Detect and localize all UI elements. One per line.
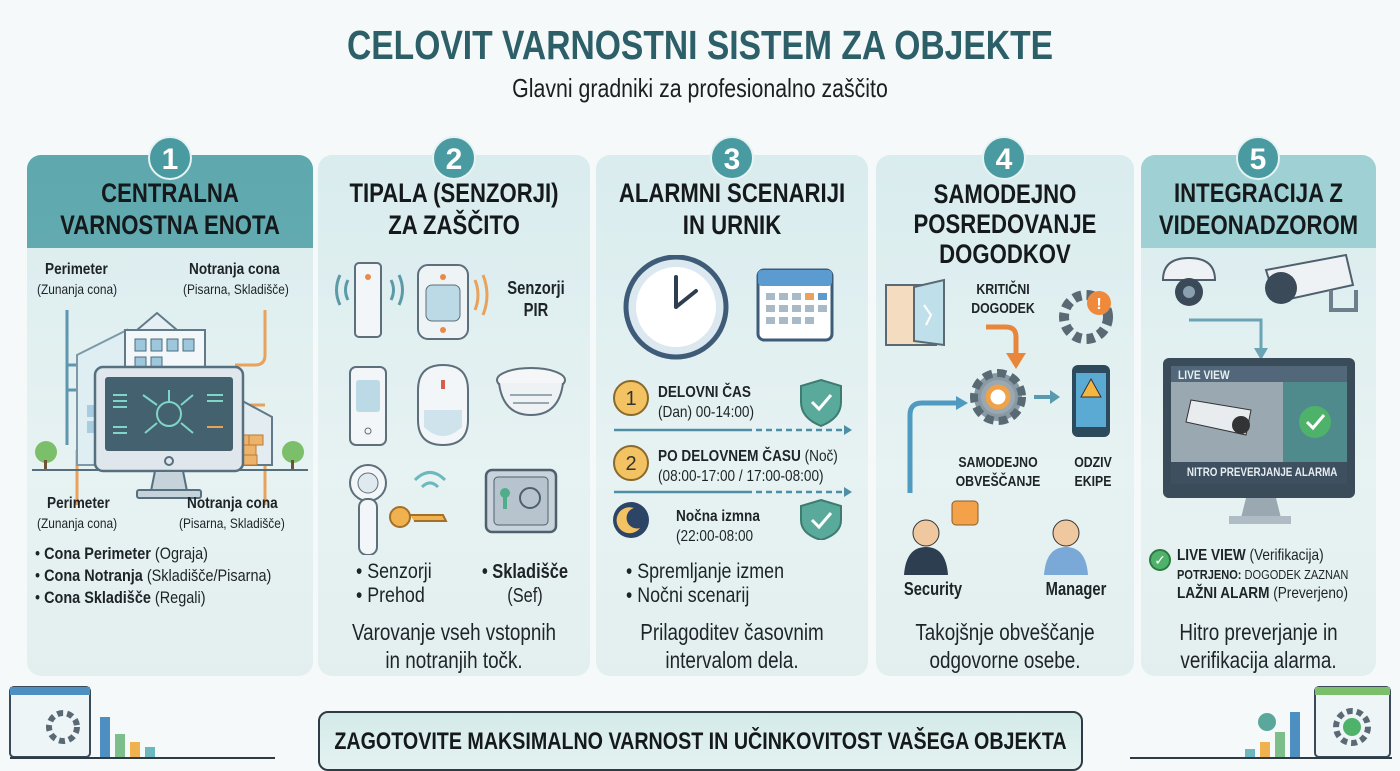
verification list: LAŽNI ALARM (Preverjeno) (1177, 585, 1348, 602)
number badge 5 (1236, 136, 1280, 180)
label senzorji PIR: PIR (524, 300, 548, 320)
panel 3: scenarios: PO DELOVNEM ČASU (Noč) (658, 448, 838, 465)
heading: ALARMNI SCENARIJI (619, 178, 845, 208)
icon: check: ✓ (1154, 552, 1166, 568)
panel 2: sensors: (Sef) (507, 585, 543, 607)
illustration: building and monitor (32, 310, 308, 505)
heading (1159, 178, 1358, 240)
bullet list: • Senzorji (356, 560, 432, 583)
sensor icons (335, 262, 566, 555)
label kriticni: KRITIČNI (976, 281, 1030, 298)
title: CELOVIT VARNOSTNI SISTEM ZA OBJEKTE (347, 22, 1053, 68)
label samodejno (956, 454, 1040, 490)
label samodejno: SAMODEJNO (958, 454, 1038, 471)
heading: CENTRALNA (101, 178, 239, 208)
number badge 2 (432, 136, 476, 180)
labels bottom: Perimeter (47, 495, 110, 512)
bottom banner (318, 711, 1083, 771)
person labels: Security (904, 579, 962, 599)
label kriticni: DOGODEK (971, 300, 1035, 317)
description: Prilagoditev časovnim (640, 619, 824, 645)
panel 5: video integration (1141, 155, 1376, 676)
label odziv: ODZIV (1074, 454, 1112, 471)
label kriticni (971, 280, 1035, 317)
verification list: POTRJENO: DOGODEK ZAZNAN (1177, 567, 1348, 582)
heading: SAMODEJNO (934, 179, 1076, 209)
bullet list zones: • Cona Notranja (Skladišče/Pisarna) (35, 566, 271, 585)
schedule text: DELOVNI ČAS (658, 384, 751, 401)
screen labels: LIVE VIEW (1178, 368, 1230, 382)
heading: INTEGRACIJA Z (1174, 178, 1343, 208)
heading: VIDEONADZOROM (1159, 210, 1358, 240)
panel 1: central unit (27, 155, 313, 676)
verification list: LIVE VIEW (Verifikacija) (1177, 547, 1324, 564)
panel 4: automatic event handling: Manager (1046, 579, 1106, 599)
header band (1141, 155, 1376, 248)
subtitle: Glavni gradniki za profesionalno zaščito (512, 73, 888, 103)
schedule rows: 1 (625, 388, 637, 410)
description: Hitro preverjanje in (1179, 619, 1338, 645)
bullet list zones: • Cona Perimeter (Ograja) (35, 544, 208, 563)
number badge 1: 1 (162, 143, 178, 176)
heading (349, 178, 559, 240)
bullet list zones: • Cona Skladišče (Regali) (35, 588, 206, 607)
labels top: Notranja cona (189, 261, 280, 278)
number badge 4: 4 (996, 143, 1012, 176)
heading: ZA ZAŠČITO (388, 210, 520, 240)
verification list (1149, 547, 1348, 602)
panel 3: scenarios: Nočna izmna (676, 508, 760, 525)
schedule text: (Dan) 00-14:00) (658, 404, 754, 421)
panel 2: sensors (318, 155, 590, 676)
labels top (37, 261, 289, 297)
description: odgovorne osebe. (929, 647, 1081, 673)
panel 3: scenarios: (22:00-08:00 (676, 528, 753, 545)
heading: POSREDOVANJE (914, 209, 1096, 239)
heading (60, 178, 280, 240)
bullet list zones (35, 544, 271, 607)
decoration left: window with gear and bars (9, 686, 275, 759)
description: Varovanje vseh vstopnih (352, 619, 556, 645)
description: intervalom dela. (665, 647, 799, 673)
label odziv: EKIPE (1075, 473, 1111, 490)
description (1179, 619, 1338, 673)
description (915, 619, 1095, 673)
cameras and monitor (1162, 254, 1358, 524)
labels top: (Pisarna, Skladišče) (183, 281, 289, 297)
number badge 4 (982, 136, 1026, 180)
schedule rows: 2 (625, 453, 637, 475)
heading (914, 179, 1096, 269)
number badge 2: 2 (446, 143, 462, 176)
panel 2: sensors: • Skladišče (482, 561, 568, 583)
bullet list: • Nočni scenarij (626, 584, 749, 607)
icon: check (1149, 549, 1171, 571)
description (352, 619, 556, 673)
bullet list (626, 560, 784, 607)
labels top: (Zunanja cona) (37, 281, 117, 297)
panel 3: scenarios (596, 155, 868, 676)
number badge 3 (710, 136, 754, 180)
heading: DOGODKOV (939, 239, 1071, 269)
labels top: Perimeter (45, 261, 108, 278)
heading: IN URNIK (683, 210, 781, 240)
labels bottom: Notranja cona (187, 495, 278, 512)
number badge 5: 5 (1250, 143, 1266, 176)
labels bottom: (Pisarna, Skladišče) (179, 515, 285, 531)
panel 5: video integration: NITRO PREVERJANJE ALARMA (1187, 465, 1337, 479)
label odziv (1074, 454, 1112, 490)
schedule text (658, 382, 754, 421)
description: Takojšnje obveščanje (915, 619, 1095, 645)
number badge 3: 3 (724, 143, 740, 176)
flow diagram (885, 278, 1113, 575)
decoration right: window with gear and bars (1130, 686, 1392, 759)
description: verifikacija alarma. (1180, 647, 1337, 673)
labels bottom (37, 495, 285, 531)
bullet list (356, 560, 432, 607)
heading (619, 178, 845, 240)
schedule rows (613, 379, 852, 540)
panel 4: automatic event handling (876, 155, 1134, 676)
heading: VARNOSTNA ENOTA (60, 210, 280, 240)
bottom banner: ZAGOTOVITE MAKSIMALNO VARNOST IN UČINKOVITOST VAŠEGA OBJEKTA (334, 728, 1067, 755)
description: in notranjih točk. (385, 647, 523, 673)
bullet list: • Spremljanje izmen (626, 560, 784, 583)
panel 3: scenarios: (08:00-17:00 / 17:00-08:00) (658, 468, 824, 485)
label senzorji PIR: Senzorji (507, 278, 565, 298)
label senzorji PIR (507, 278, 565, 320)
flow diagram: ! (1096, 296, 1102, 313)
heading: TIPALA (SENZORJI) (349, 178, 559, 208)
labels bottom: (Zunanja cona) (37, 515, 117, 531)
description (640, 619, 824, 673)
number badge 1 (148, 136, 192, 180)
clock and calendar icons (624, 255, 834, 360)
header band (27, 155, 313, 248)
label samodejno: OBVEŠČANJE (956, 473, 1040, 490)
bullet list: • Prehod (356, 584, 425, 607)
